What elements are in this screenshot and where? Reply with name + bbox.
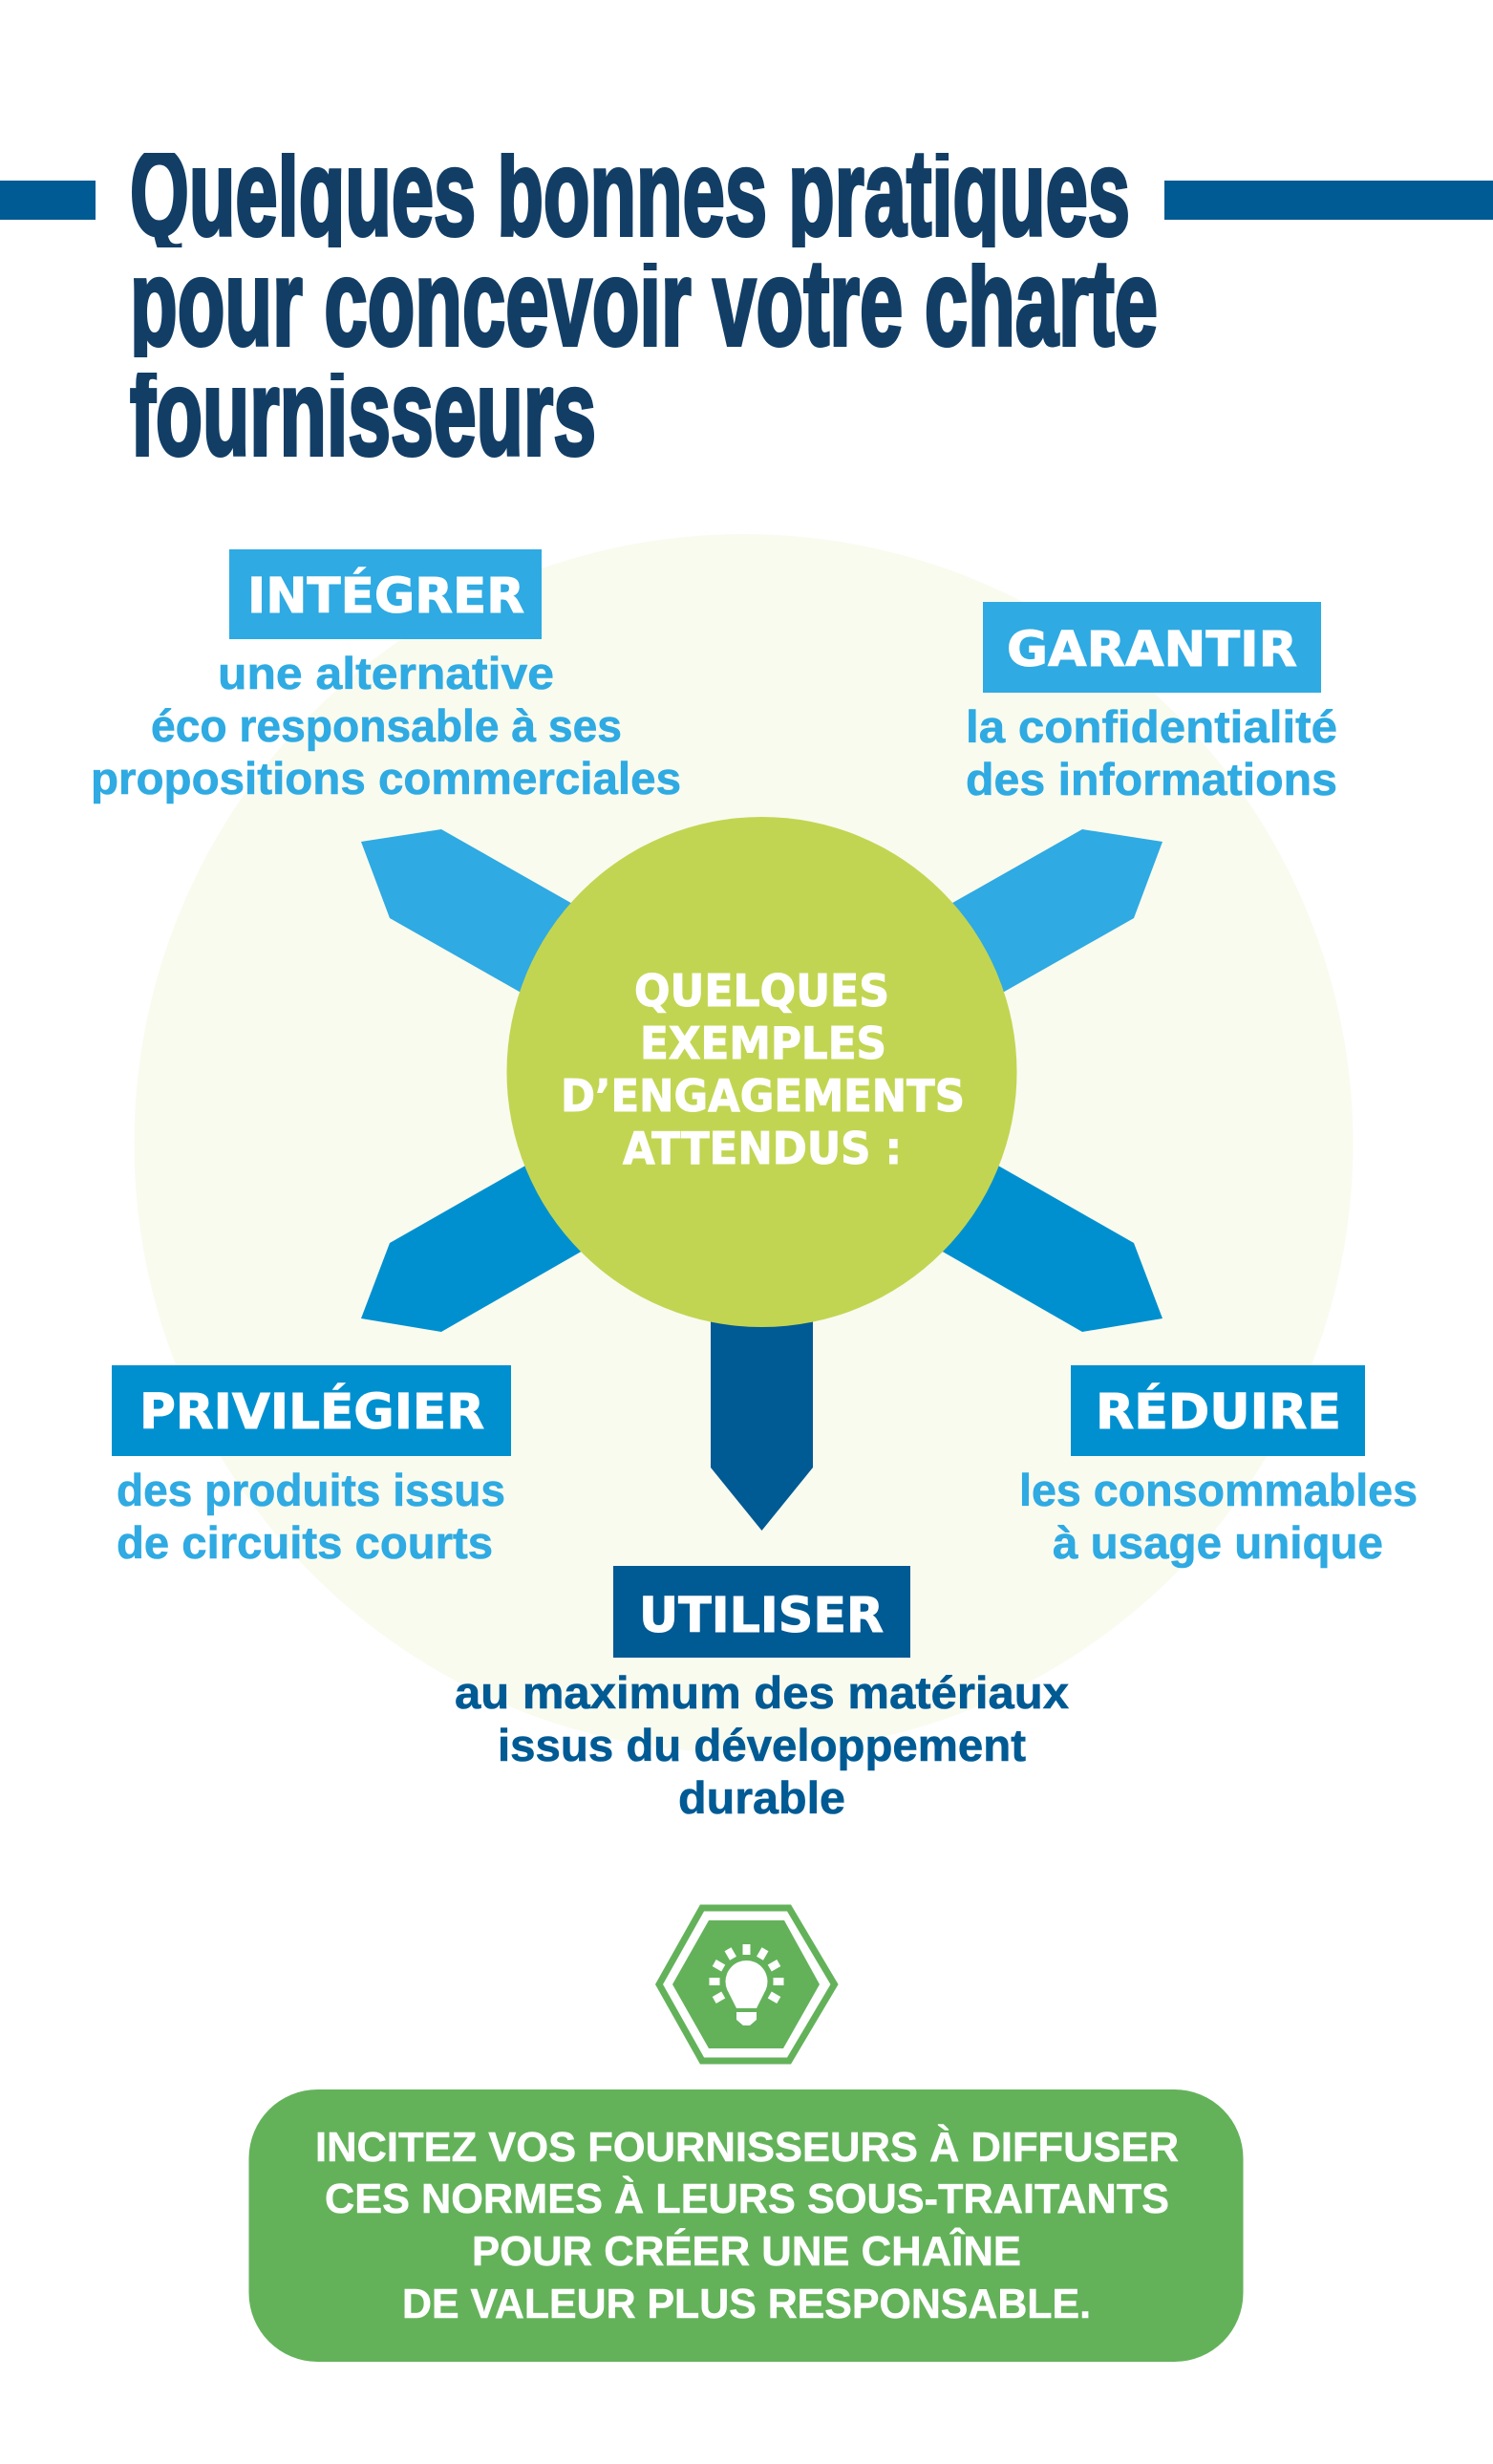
callout: CES NORMES À LEURS SOUS-TRAITANTS <box>325 2175 1169 2222</box>
panel: utiliser: UTILISER <box>639 1588 884 1644</box>
panel: intégrer: éco responsable à ses <box>151 700 622 751</box>
panel: privilégier: des produits issus <box>117 1465 505 1515</box>
panel: privilégier: de circuits courts <box>117 1517 493 1568</box>
callout: DE VALEUR PLUS RESPONSABLE. <box>402 2281 1091 2327</box>
header accent bar: right <box>1164 181 1493 220</box>
panel: garantir: GARANTIR <box>1007 622 1297 678</box>
callout: INCITEZ VOS FOURNISSEURS À DIFFUSER <box>315 2123 1179 2171</box>
panel: garantir: la confidentialité <box>966 701 1337 752</box>
panel: réduire: à usage unique <box>1053 1517 1383 1568</box>
background circle <box>134 534 1353 1753</box>
panel: intégrer: une alternative <box>218 648 554 698</box>
arrow: bottom left <box>361 1096 699 1332</box>
title <box>130 153 1156 458</box>
panel: intégrer <box>91 549 681 803</box>
panel: réduire <box>1019 1365 1418 1568</box>
panel: utiliser: durable <box>678 1772 845 1823</box>
panel: intégrer: propositions commerciales <box>91 753 681 803</box>
panel: privilégier <box>112 1365 511 1568</box>
panel: intégrer: INTÉGRER <box>247 567 524 625</box>
central circle: QUELQUES <box>634 965 889 1017</box>
title: fournisseurs <box>130 345 596 482</box>
panel: réduire: les consommables <box>1019 1465 1418 1515</box>
central circle: ATTENDUS : <box>623 1123 902 1174</box>
arrow: top right <box>848 829 1162 1051</box>
header accent bar: left <box>0 181 96 220</box>
callout: POUR CRÉER UNE CHAÎNE <box>472 2227 1021 2275</box>
panel: réduire: RÉDUIRE <box>1096 1382 1341 1441</box>
arrow: bottom right <box>824 1096 1162 1332</box>
panel: utiliser: issus du développement <box>498 1720 1026 1770</box>
panel: garantir <box>966 602 1337 804</box>
arrow: bottom centre <box>711 1242 813 1531</box>
icon: lightbulb in hexagon <box>659 1908 835 2061</box>
panel: utiliser <box>455 1566 1069 1823</box>
central circle: D’ENGAGEMENTS <box>561 1070 965 1122</box>
panel: utiliser: au maximum des matériaux <box>455 1667 1069 1718</box>
central circle <box>506 817 1016 1327</box>
central circle: EXEMPLES <box>640 1018 886 1069</box>
arrow: top left <box>361 829 675 1051</box>
panel: garantir: des informations <box>966 754 1337 804</box>
panel: privilégier: PRIVILÉGIER <box>139 1382 484 1441</box>
callout <box>248 2089 1244 2362</box>
